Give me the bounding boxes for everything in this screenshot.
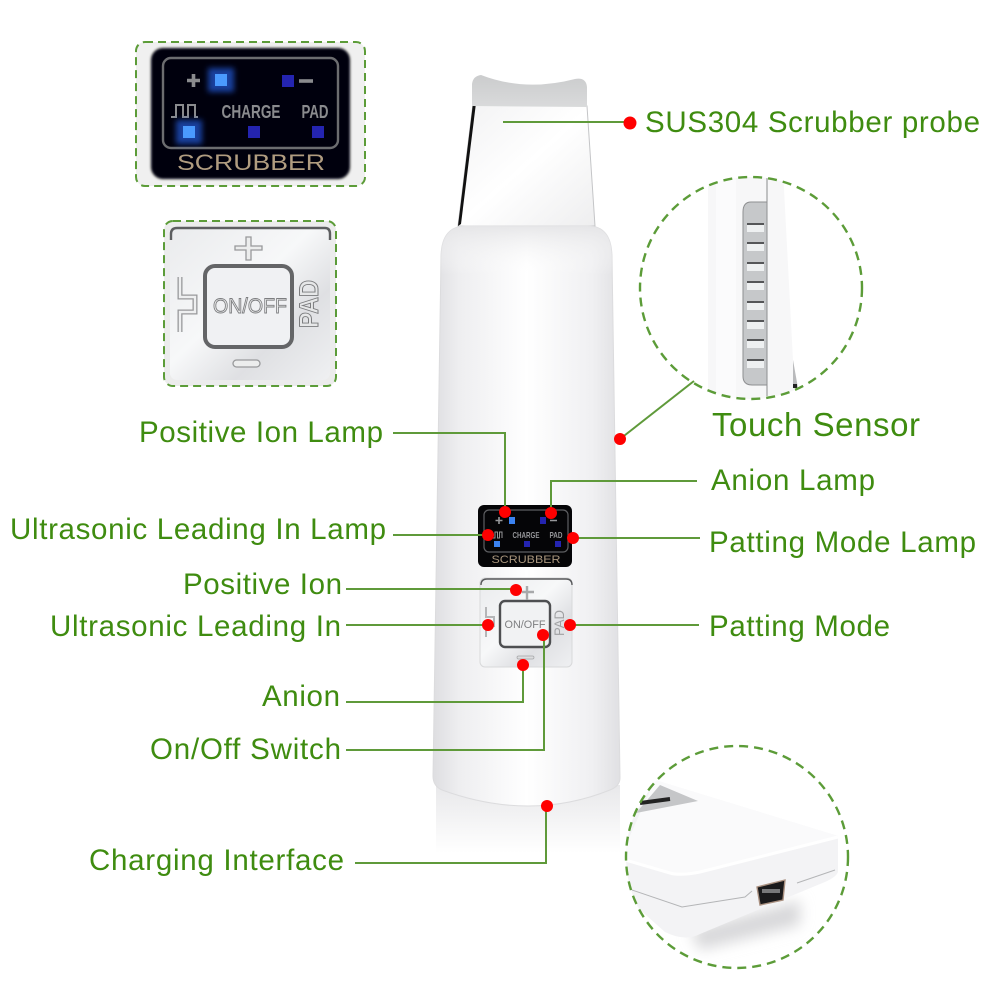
leader: anion (346, 659, 529, 702)
device: button pad (480, 578, 572, 667)
label: Anion Lamp: Anion Lamp (711, 464, 875, 497)
panel: button pad close-up (164, 221, 336, 386)
leader: positive ion (346, 584, 522, 596)
leader: charging interface (355, 800, 553, 863)
callout: charging port magnifier (620, 746, 848, 968)
label: CHARGE: CHARGE (222, 102, 280, 122)
icon: plus and lamp (187, 68, 234, 92)
panel: button pad close-up: ON/OFF (213, 295, 287, 318)
label: Positive Ion: Positive Ion (183, 568, 342, 601)
device: LED display: PAD (550, 530, 562, 540)
label: On/Off Switch: On/Off Switch (150, 733, 341, 766)
panel: LED display close-up (136, 42, 365, 186)
leader: positive ion lamp (393, 433, 511, 518)
device: button pad: PAD (551, 610, 567, 636)
leader: patting mode (564, 619, 699, 631)
device: button pad: ON/OFF (504, 619, 546, 631)
leader: probe (503, 116, 636, 130)
device: LED display (478, 505, 572, 567)
device: reflection under body (436, 785, 620, 853)
label: SUS304 Scrubber probe: SUS304 Scrubber probe (645, 106, 980, 139)
device: white body (433, 226, 620, 806)
device: LED display: CHARGE (512, 530, 540, 540)
panel: button pad close-up: PAD (294, 280, 324, 328)
label: Positive Ion Lamp: Positive Ion Lamp (139, 416, 383, 449)
callout: touch sensor magnifier (640, 170, 862, 410)
label: Ultrasonic Leading In Lamp: Ultrasonic Leading In Lamp (10, 513, 386, 546)
leader: ultrasonic leading in lamp (393, 529, 494, 541)
device: LED display: SCRUBBER (492, 554, 561, 566)
label: Patting Mode: Patting Mode (709, 610, 890, 643)
leader: ultrasonic leading in (346, 619, 494, 631)
label: Patting Mode Lamp: Patting Mode Lamp (709, 526, 976, 559)
leader: patting mode lamp (567, 532, 700, 544)
label: PAD: PAD (302, 102, 328, 122)
label: Ultrasonic Leading In: Ultrasonic Leading In (50, 610, 341, 643)
leader: touch sensor (614, 381, 694, 445)
label: Anion: Anion (262, 680, 340, 713)
icon: minus and lamp (282, 75, 313, 87)
leader: on/off switch (346, 629, 549, 750)
leader: anion lamp (545, 481, 697, 519)
label: Charging Interface: Charging Interface (89, 844, 344, 877)
label: Touch Sensor: Touch Sensor (712, 406, 920, 443)
device: scrubber probe (458, 75, 595, 226)
label: SCRUBBER: SCRUBBER (177, 150, 325, 175)
icon: pulse wave (171, 105, 198, 117)
